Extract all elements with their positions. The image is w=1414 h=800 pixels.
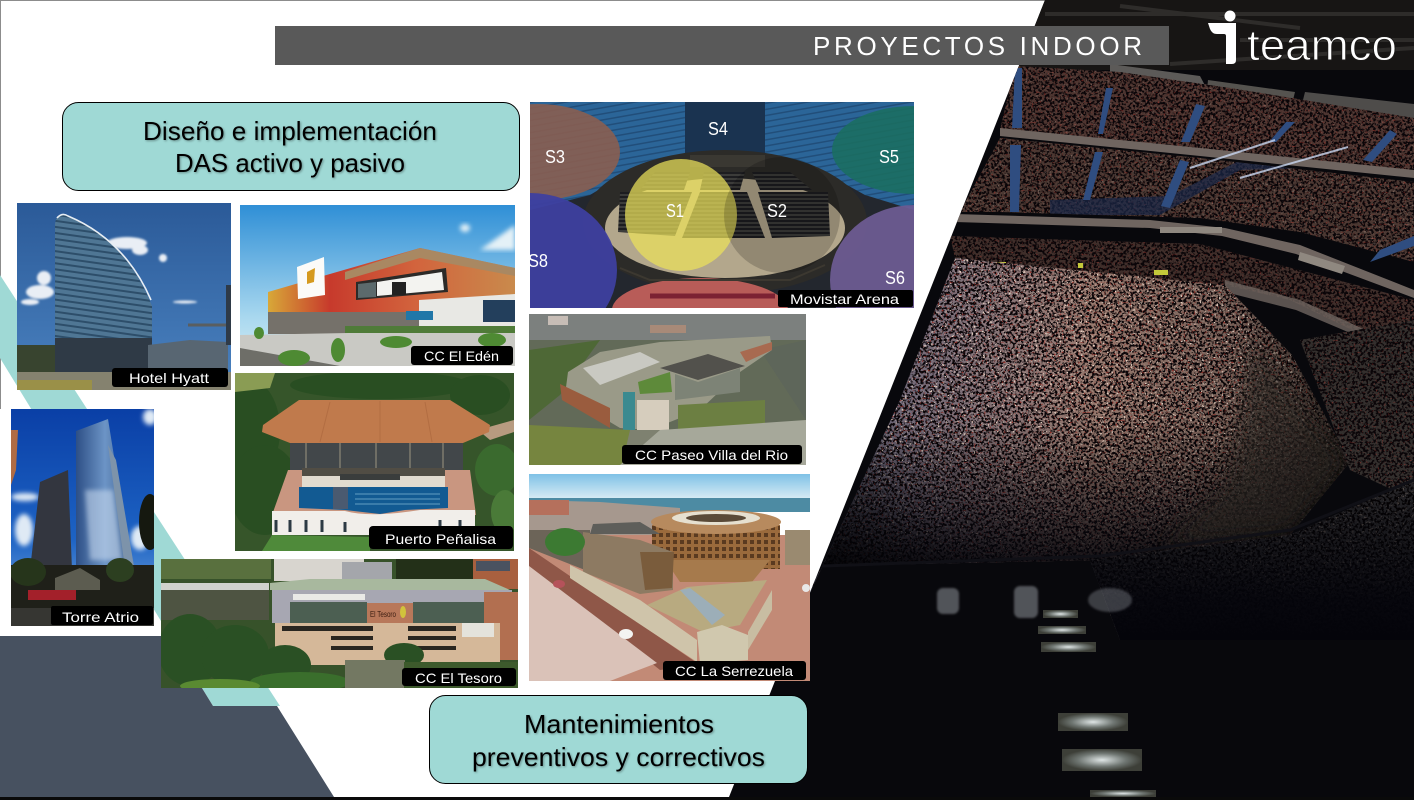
logo panel: El Tesoro bbox=[370, 610, 396, 619]
tree bbox=[545, 528, 585, 556]
mall facade bbox=[268, 248, 515, 318]
label: CC El Tesoro: CC El Tesoro bbox=[415, 670, 502, 686]
photo: CC El Edén bbox=[240, 205, 515, 366]
glass atrium bbox=[675, 368, 740, 400]
sector S2 overlay bbox=[724, 157, 840, 273]
dark wall strip and trees bbox=[529, 530, 590, 572]
light beams bbox=[1190, 140, 1348, 178]
logo panel bbox=[367, 603, 413, 623]
upper tier crowd bbox=[1000, 66, 1414, 170]
sea bbox=[529, 498, 810, 512]
heading line 2: DAS activo y pasivo bbox=[175, 148, 405, 178]
sector labels: S5 bbox=[879, 147, 899, 167]
side balcony crowd bbox=[1300, 320, 1414, 488]
blue stair aisles bbox=[1010, 68, 1414, 262]
trees and ground bbox=[17, 345, 55, 375]
green wall panels bbox=[290, 602, 367, 623]
concrete ledges bbox=[957, 128, 1414, 332]
barrier rail bbox=[823, 480, 1414, 566]
sector S1 overlay bbox=[625, 159, 737, 271]
heading: maintenance bbox=[430, 696, 808, 784]
mall wings bbox=[565, 336, 772, 430]
sector S8 overlay bbox=[443, 193, 617, 347]
stage backdrop bbox=[685, 102, 765, 157]
parked cars bbox=[619, 629, 633, 639]
bridge bbox=[161, 583, 269, 590]
historic building with terraces bbox=[583, 532, 673, 594]
darkened foreground crowd bbox=[1090, 480, 1414, 640]
photo: Movistar Arena sector map bbox=[443, 102, 998, 355]
green roof bbox=[638, 372, 672, 394]
city background bbox=[529, 314, 806, 340]
red bus bbox=[28, 590, 76, 600]
facade with windows bbox=[637, 400, 669, 430]
clay roof bbox=[262, 400, 490, 443]
glass roof pyramids bbox=[647, 580, 767, 632]
sector labels: S3 bbox=[545, 147, 565, 167]
glass gallery bbox=[290, 443, 463, 470]
dark inner ring bbox=[583, 150, 867, 294]
label: CC Paseo Villa del Rio: CC Paseo Villa del Rio bbox=[635, 447, 788, 463]
label: Movistar Arena bbox=[778, 290, 913, 307]
signage tower bbox=[623, 392, 635, 430]
photo: Torre Atrio bbox=[10, 409, 161, 626]
balcony box white bars bbox=[1160, 227, 1345, 274]
label: Movistar Arena: Movistar Arena bbox=[790, 291, 899, 307]
label: Torre Atrio: Torre Atrio bbox=[62, 609, 139, 625]
right building bbox=[785, 530, 810, 565]
brick side wall bbox=[484, 592, 518, 660]
label: Hotel Hyatt: Hotel Hyatt bbox=[129, 370, 209, 386]
standing people on stairs bbox=[937, 586, 1132, 618]
glass tower bbox=[76, 419, 134, 580]
dark tree by the tower bbox=[139, 494, 161, 550]
heading: design and implementation bbox=[62, 102, 520, 190]
sector S7 overlay bbox=[612, 278, 788, 342]
photo: CC Paseo Villa del Rio bbox=[529, 314, 806, 465]
clouds bbox=[21, 237, 197, 305]
photo: CC El Tesoro bbox=[158, 559, 518, 693]
arena ceiling bbox=[1000, 0, 1414, 120]
sector S3 overlay bbox=[456, 104, 620, 200]
upper blue seating bbox=[530, 102, 690, 210]
sector labels: S6 bbox=[885, 268, 905, 288]
round building bbox=[651, 510, 781, 582]
street sidewalk bbox=[529, 548, 700, 670]
arena floor bbox=[605, 178, 845, 278]
plaza paving bbox=[529, 535, 810, 681]
dark side tower bbox=[30, 470, 72, 570]
clouds bbox=[11, 409, 157, 550]
photo: Puerto Peñalisa bbox=[220, 371, 519, 551]
surrounding trees bbox=[220, 371, 519, 535]
sector labels: S2 bbox=[767, 201, 787, 221]
clouds bbox=[460, 224, 515, 250]
label: CC La Serrezuela: CC La Serrezuela bbox=[675, 663, 793, 679]
lower tier boxes crowd bbox=[950, 236, 1414, 330]
sector labels: S1 bbox=[666, 201, 684, 221]
security vests bbox=[994, 262, 1168, 275]
dark central roof bbox=[660, 354, 745, 380]
long colonial wall bbox=[570, 565, 697, 662]
sector labels: S8 bbox=[528, 251, 548, 271]
lit stair steps bbox=[1038, 610, 1156, 797]
heading line 2: preventivos y correctivos bbox=[472, 742, 765, 772]
dark slate corner shape bbox=[0, 636, 334, 797]
teal diagonal stripe bbox=[0, 275, 280, 706]
floor seats bbox=[618, 172, 830, 238]
white backing behind Torre Atrio bbox=[0, 409, 161, 636]
railing bbox=[620, 265, 825, 280]
middle tier crowd bbox=[960, 138, 1414, 262]
arena crowd photo bbox=[700, 0, 1414, 800]
street and trees bbox=[11, 565, 154, 626]
background buildings bbox=[161, 559, 271, 579]
sector S6 overlay bbox=[830, 205, 998, 355]
white logo sign bbox=[297, 257, 325, 299]
foreground trees and road bbox=[529, 430, 806, 465]
label: CC El Edén bbox=[411, 346, 513, 365]
sector labels: S4 bbox=[708, 119, 728, 139]
foreground trees bbox=[158, 614, 424, 692]
title text: PROYECTOS INDOOR bbox=[813, 31, 1142, 61]
heading line 1: Mantenimientos bbox=[524, 709, 714, 739]
green field left bbox=[529, 340, 600, 420]
entrance facade bbox=[697, 625, 748, 664]
pool deck bbox=[272, 470, 476, 515]
sector labels bbox=[528, 119, 905, 288]
beige lower floors bbox=[275, 623, 500, 665]
label: Torre Atrio bbox=[51, 606, 153, 625]
label: Hotel Hyatt bbox=[112, 368, 228, 387]
walkway at crowd edge bbox=[1160, 340, 1350, 548]
label: CC El Edén: CC El Edén bbox=[424, 348, 499, 364]
lower white building bbox=[272, 510, 475, 535]
hedge and lawn bbox=[262, 535, 370, 551]
hotel tower bbox=[55, 214, 152, 342]
plaza and greenery bbox=[240, 330, 515, 366]
label: CC Paseo Villa del Rio bbox=[622, 445, 802, 464]
teamco logo bbox=[1208, 10, 1397, 70]
title bar bbox=[275, 26, 1169, 65]
mall roof bbox=[270, 579, 510, 590]
bottom black edge bbox=[0, 797, 1414, 800]
label: Puerto Peñalisa bbox=[369, 526, 513, 549]
orange neighbour building edge bbox=[11, 430, 18, 485]
photo: CC La Serrezuela bbox=[529, 474, 810, 681]
logo wordmark: teamco bbox=[1247, 21, 1397, 70]
sector S5 overlay bbox=[832, 106, 996, 194]
photo: Hotel Hyatt bbox=[17, 203, 231, 390]
grey mall body bbox=[272, 590, 512, 623]
low building at right bbox=[148, 340, 228, 372]
billboard bbox=[356, 268, 448, 300]
label: CC La Serrezuela bbox=[663, 661, 806, 680]
swimming pool bbox=[299, 487, 448, 514]
heading line 1: Diseño e implementación bbox=[143, 116, 437, 146]
label: CC El Tesoro bbox=[402, 668, 516, 686]
main floor crowd bbox=[810, 258, 1348, 593]
old city roofs bbox=[529, 500, 680, 540]
vertical garden bbox=[678, 400, 765, 432]
label: Puerto Peñalisa: Puerto Peñalisa bbox=[385, 531, 496, 547]
diagonal street bbox=[529, 566, 657, 681]
